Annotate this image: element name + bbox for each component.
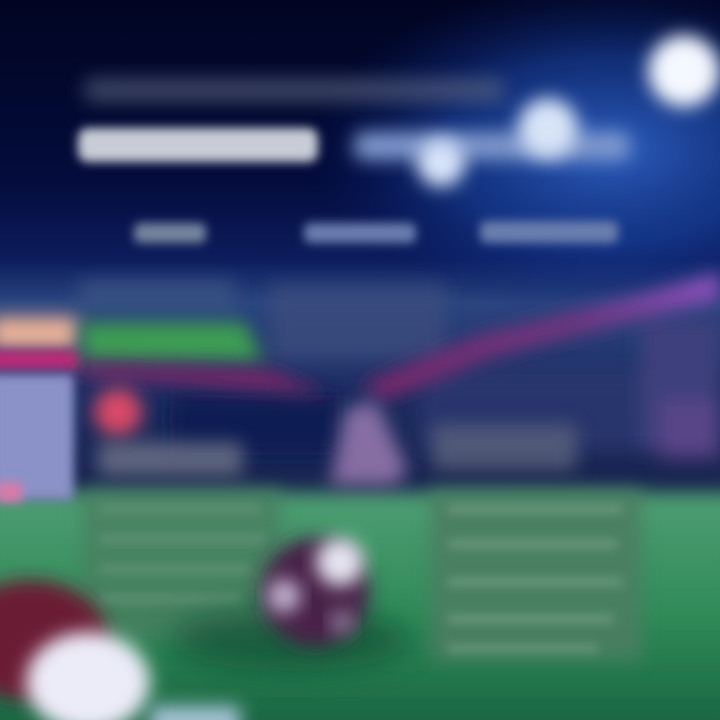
title: [78, 78, 630, 162]
stadium stands: [80, 280, 720, 460]
panel: left card: [82, 442, 282, 640]
pitch: [0, 492, 720, 720]
pink and cream banner: [0, 316, 78, 350]
magenta band: [0, 350, 80, 370]
panel: left blocks: [0, 316, 80, 502]
title line two: left word: [78, 128, 318, 162]
label three: [480, 221, 618, 243]
labels row: [134, 221, 618, 243]
card text lines: [448, 505, 623, 652]
pink accent: [0, 482, 22, 502]
pink streak: right: [360, 272, 720, 400]
title line two: right word: [354, 132, 630, 160]
panel: right card: [430, 425, 642, 660]
green bar: [82, 322, 264, 362]
card text lines: [100, 505, 265, 603]
pink streak: left: [80, 362, 330, 395]
lavender panel: [0, 374, 74, 500]
player figure: [330, 400, 408, 485]
stadium floodlight: left: [417, 139, 465, 187]
title line one: [84, 78, 504, 102]
stadium floodlight: right: [648, 35, 720, 107]
card heading: [432, 425, 577, 471]
icon: soccer ball: [170, 538, 410, 670]
label two: [304, 223, 416, 243]
icon: foreground soccer ball: [0, 580, 240, 720]
stadium floodlight: middle: [518, 98, 578, 158]
label one: [134, 223, 206, 243]
icon: red circle: [94, 388, 142, 436]
card heading: [98, 442, 243, 476]
